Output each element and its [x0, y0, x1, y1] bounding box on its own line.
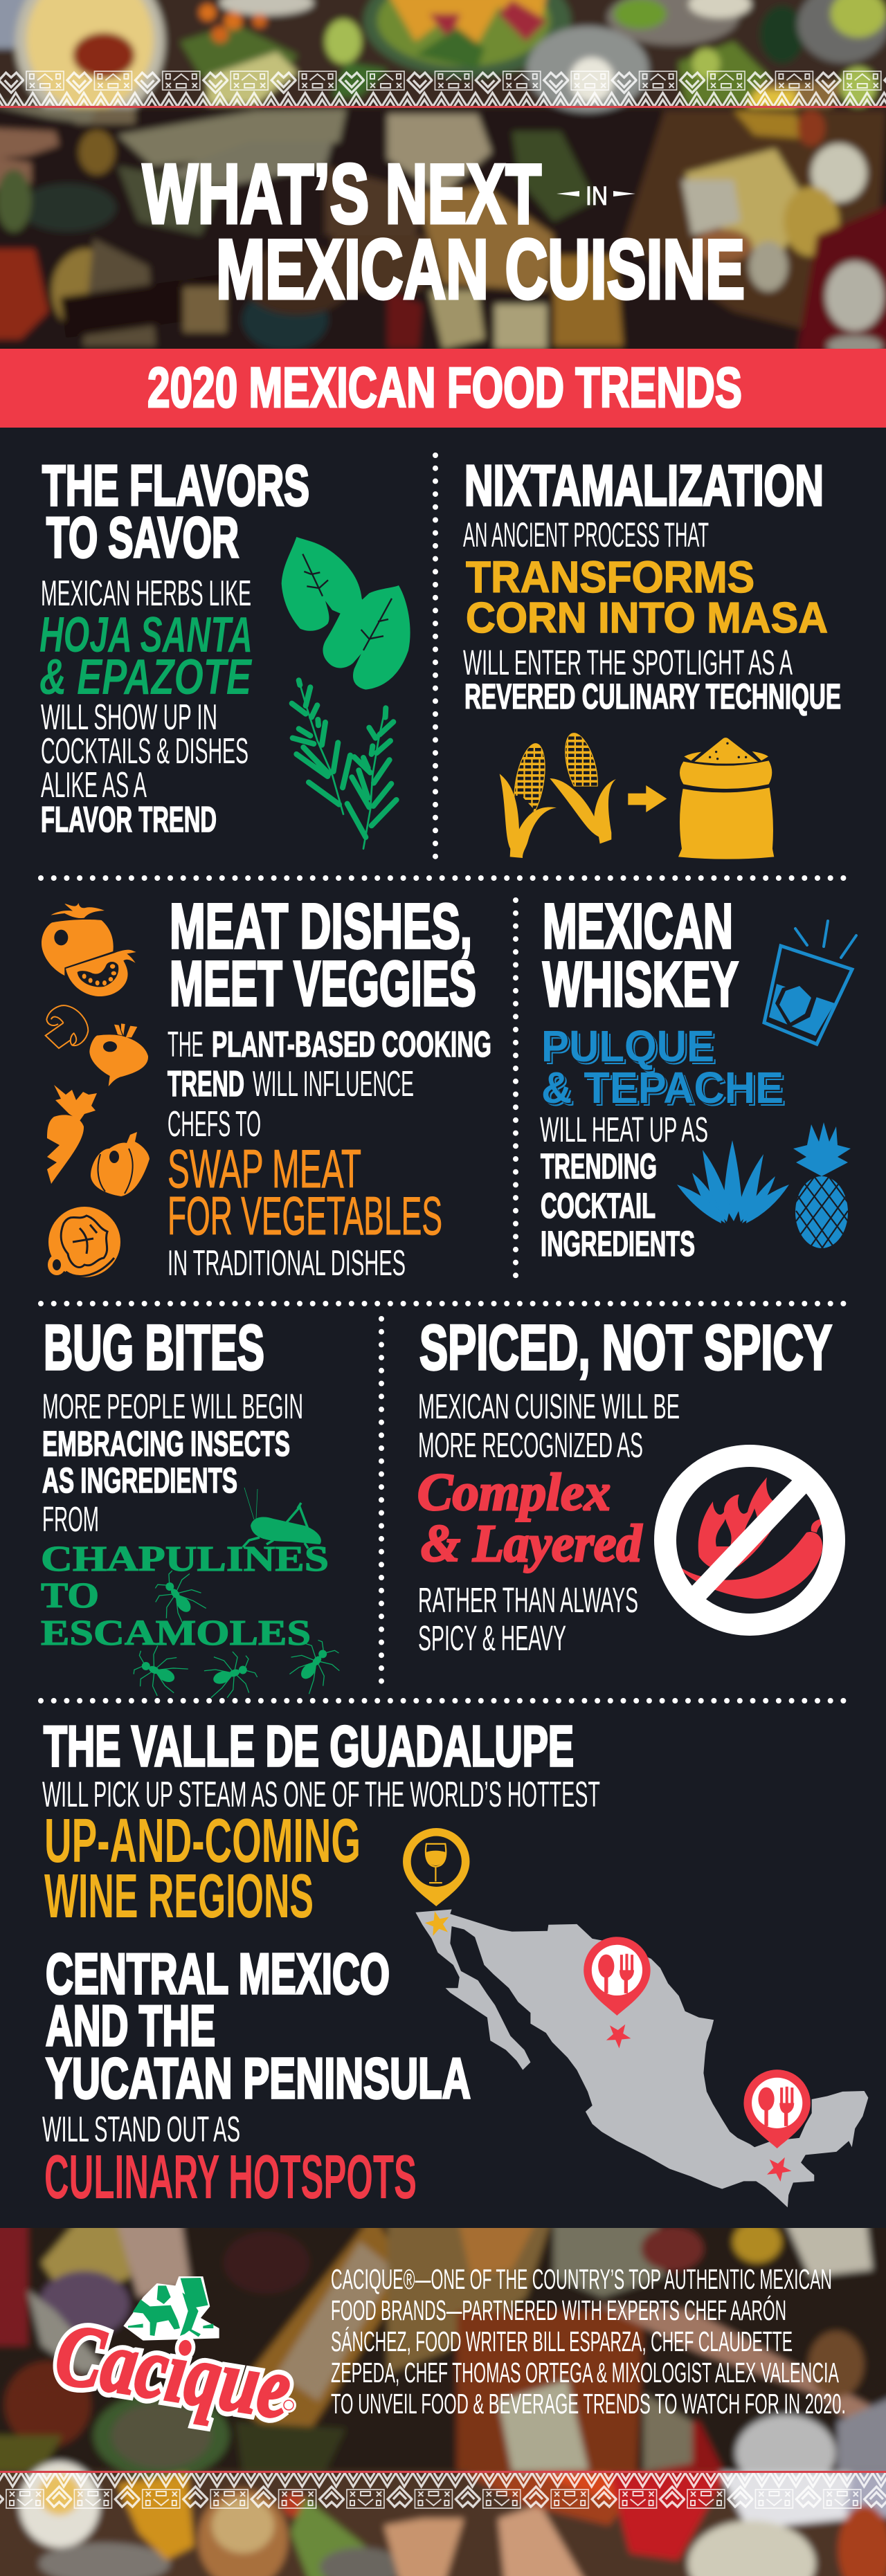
panel: meat dishes, meet veggies [42, 891, 491, 1284]
panel: valle de guadalupe and culinary regions [42, 1714, 868, 2212]
closing text [463, 643, 841, 716]
heading [42, 453, 309, 569]
highlight: & TEPACHE [541, 1063, 784, 1113]
highlight [417, 1463, 642, 1573]
heading: valle: THE VALLE DE GUADALUPE [44, 1714, 574, 1778]
highlight: culinary hotspots: CULINARY HOTSPOTS [44, 2143, 417, 2212]
logo wordmark: Cacique [50, 2305, 297, 2438]
culinary pin: central mexico [584, 1937, 651, 2016]
highlight: wine regions: WINE REGIONS [44, 1862, 314, 1931]
bottom food photo [0, 2207, 886, 2576]
highlight: PULQUE [541, 1021, 714, 1071]
icon: cabbage [48, 1207, 120, 1277]
highlight: wine regions: UP-AND-COMING [44, 1807, 361, 1876]
herbs text: ALIKE AS A [41, 765, 147, 805]
body text: CHEFS TO [168, 1104, 261, 1144]
herb names: HOJA SANTA [39, 608, 253, 663]
logo wordmark: Cacique [50, 2305, 297, 2438]
icon: agave [677, 1140, 789, 1223]
icon: ant [127, 1640, 192, 1703]
wine pin [403, 1828, 469, 1906]
panel: mexican whiskey [540, 891, 856, 1263]
heading: MEXICAN [543, 891, 733, 962]
star marker [765, 2157, 793, 2184]
title connector: in [557, 182, 635, 211]
logo mark: donkey and walker [123, 2276, 219, 2341]
icon: ant [198, 1645, 262, 1706]
icon: tomato, mushroom and beet [42, 903, 148, 1086]
body text: MEXICAN CUISINE WILL BE [418, 1387, 680, 1426]
body text: MORE PEOPLE WILL BEGIN [42, 1387, 303, 1426]
icon: ant [280, 1632, 348, 1699]
body text [418, 1387, 680, 1658]
icon: no spicy sign [665, 1456, 834, 1625]
divider dots [41, 455, 848, 1701]
herbs text: COCKTAILS & DISHES [41, 731, 248, 771]
star marker [605, 2024, 631, 2049]
registered mark [281, 2397, 296, 2413]
body text: INGREDIENTS [541, 1224, 695, 1263]
decorative pattern band [0, 2473, 886, 2509]
decorative pattern band [0, 71, 886, 107]
herb names [39, 608, 253, 705]
body text [168, 1025, 491, 1284]
body text: AS INGREDIENTS [42, 1461, 237, 1500]
icon: epazote sprigs [292, 680, 397, 849]
herbs text [41, 574, 251, 840]
panel: the flavors to savor [39, 453, 410, 849]
highlight: PULQUE [544, 1024, 717, 1074]
body text: TREND [168, 1064, 244, 1104]
body text: RATHER THAN ALWAYS [418, 1580, 638, 1620]
highlight: & TEPACHE [544, 1066, 786, 1115]
herbs text: WILL SHOW UP IN [41, 697, 217, 738]
heading: central mexico [46, 1942, 471, 2110]
title connector: in: IN [586, 182, 608, 211]
logo: cacique [50, 2276, 297, 2438]
panel: bug bites [41, 1313, 348, 1706]
heading: WHISKEY [543, 949, 739, 1020]
star marker [423, 1908, 452, 1937]
map of mexico with pins [403, 1828, 868, 2207]
body text: FROM [42, 1499, 99, 1539]
highlight: CORN INTO MASA [466, 594, 828, 642]
heading: MEET VEGGIES [170, 949, 476, 1019]
top food photo [0, 0, 886, 360]
insect names: ESCAMOLES [41, 1614, 311, 1653]
title: WHAT’S NEXT [143, 147, 541, 241]
icon: carrot [47, 1085, 97, 1184]
highlight: & TEPACHE [543, 1064, 785, 1114]
highlight: TRANSFORMS [466, 552, 754, 602]
herbs text: FLAVOR TREND [41, 800, 217, 840]
heading: central mexico: CENTRAL MEXICO [46, 1942, 390, 2006]
text: stand out: WILL STAND OUT AS [42, 2110, 240, 2150]
icon: hoja santa leaves [282, 537, 410, 690]
body text: WILL INFLUENCE [253, 1064, 414, 1104]
panel: nixtamalization [463, 453, 841, 859]
culinary pin: yucatan [743, 2070, 811, 2148]
highlight: PULQUE [543, 1023, 716, 1072]
icon: bell pepper [91, 1132, 150, 1196]
highlight: SWAP MEAT [168, 1138, 361, 1199]
heading: MEAT DISHES, [170, 891, 472, 962]
heading [543, 891, 739, 1020]
body text: EMBRACING INSECTS [42, 1424, 290, 1463]
icon: grasshopper [243, 1488, 321, 1549]
heading: THE FLAVORS [42, 453, 309, 518]
highlight [541, 1021, 786, 1115]
map shape [415, 1909, 868, 2207]
heading: central mexico: YUCATAN PENINSULA [46, 2046, 471, 2110]
body text: TRENDING [541, 1147, 657, 1186]
highlight: wine regions [44, 1807, 361, 1931]
body text: WILL HEAT UP AS [540, 1110, 708, 1149]
herb names: & EPAZOTE [39, 650, 252, 705]
highlight: Complex [417, 1463, 611, 1522]
insect names: CHAPULINES [41, 1540, 329, 1579]
insect names [41, 1540, 329, 1653]
footer text [331, 2263, 846, 2420]
highlight: FOR VEGETABLES [168, 1185, 442, 1246]
title [143, 147, 745, 316]
highlight [466, 552, 828, 642]
heading: TO SAVOR [46, 505, 239, 569]
body text: PLANT-BASED COOKING [212, 1025, 491, 1065]
red subtitle banner [0, 349, 886, 428]
heading: central mexico: AND THE [46, 1993, 215, 2058]
herbs text: MEXICAN HERBS LIKE [41, 574, 251, 614]
icon: pineapple [793, 1122, 851, 1250]
icon: corn, arrow and masa sack [500, 729, 774, 859]
icon: whiskey glass [764, 921, 856, 1044]
body text: THE [168, 1025, 204, 1065]
body text: SPICY & HEAVY [418, 1618, 566, 1658]
body text: MORE RECOGNIZED AS [418, 1425, 643, 1465]
heading [170, 891, 476, 1019]
panel: spiced, not spicy [417, 1313, 834, 1658]
body text: IN TRADITIONAL DISHES [168, 1243, 406, 1284]
insect names: TO [41, 1576, 99, 1616]
body text [540, 1110, 708, 1263]
icon: ant [145, 1563, 213, 1632]
heading: BUG BITES [44, 1313, 264, 1383]
highlight [168, 1138, 442, 1246]
body text: COCKTAIL [541, 1186, 656, 1225]
highlight: & Layered [421, 1515, 642, 1573]
body text [42, 1387, 303, 1539]
